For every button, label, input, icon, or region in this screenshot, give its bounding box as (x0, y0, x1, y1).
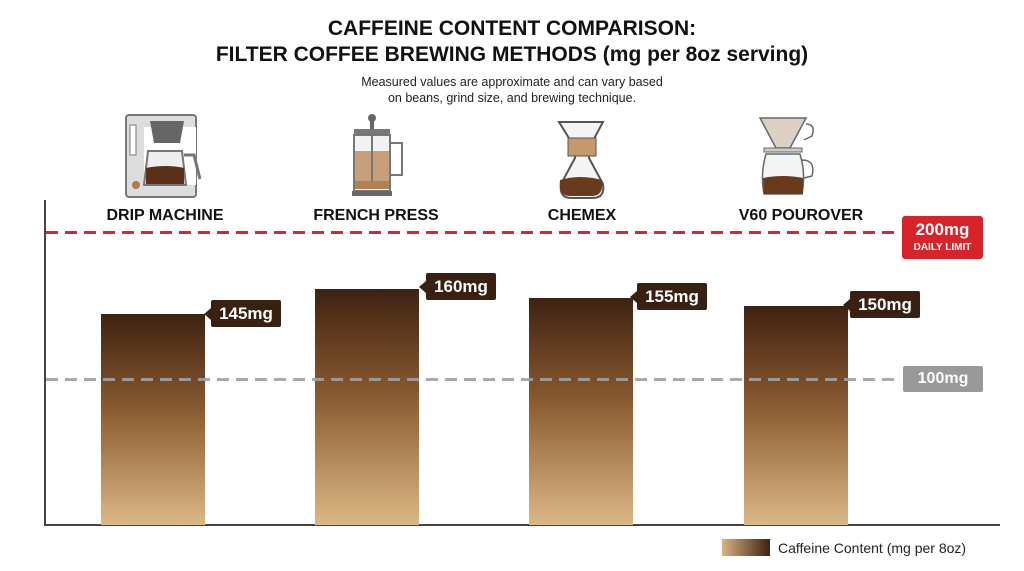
title (216, 17, 808, 66)
icon: v60 pourover (758, 117, 814, 195)
title: CAFFEINE CONTENT COMPARISON: (328, 17, 696, 40)
bars: 160mg (434, 277, 488, 296)
text: DRIP MACHINE (106, 207, 224, 224)
subtitle: on beans, grind size, and brewing technique. (388, 91, 636, 105)
callout: 100mg: 100mg (918, 370, 968, 387)
callout: daily limit: 200mg (916, 220, 969, 239)
reference line: 100mg (46, 378, 896, 381)
text: FRENCH PRESS (313, 207, 439, 224)
reference line: 200mg (46, 231, 896, 234)
title: FILTER COFFEE BREWING METHODS (mg per 8oz serving) (216, 43, 808, 66)
callout: daily limit: DAILY LIMIT (914, 242, 971, 253)
icon: chemex (557, 121, 605, 199)
bars: 150mg (858, 295, 912, 314)
subtitle: Measured values are approximate and can vary based (361, 75, 663, 89)
callout: daily limit (902, 216, 983, 259)
axes (44, 200, 46, 526)
callout: 100mg (903, 366, 983, 392)
subtitle (361, 75, 663, 105)
method names (106, 207, 863, 224)
bars: 145mg (219, 304, 273, 323)
icon: drip machine (125, 114, 202, 198)
text: V60 POUROVER (739, 207, 863, 224)
legend: Caffeine Content (mg per 8oz) (778, 540, 966, 556)
bars: 155mg (645, 287, 699, 306)
text: CHEMEX (548, 207, 616, 224)
icon: french press (352, 114, 403, 196)
